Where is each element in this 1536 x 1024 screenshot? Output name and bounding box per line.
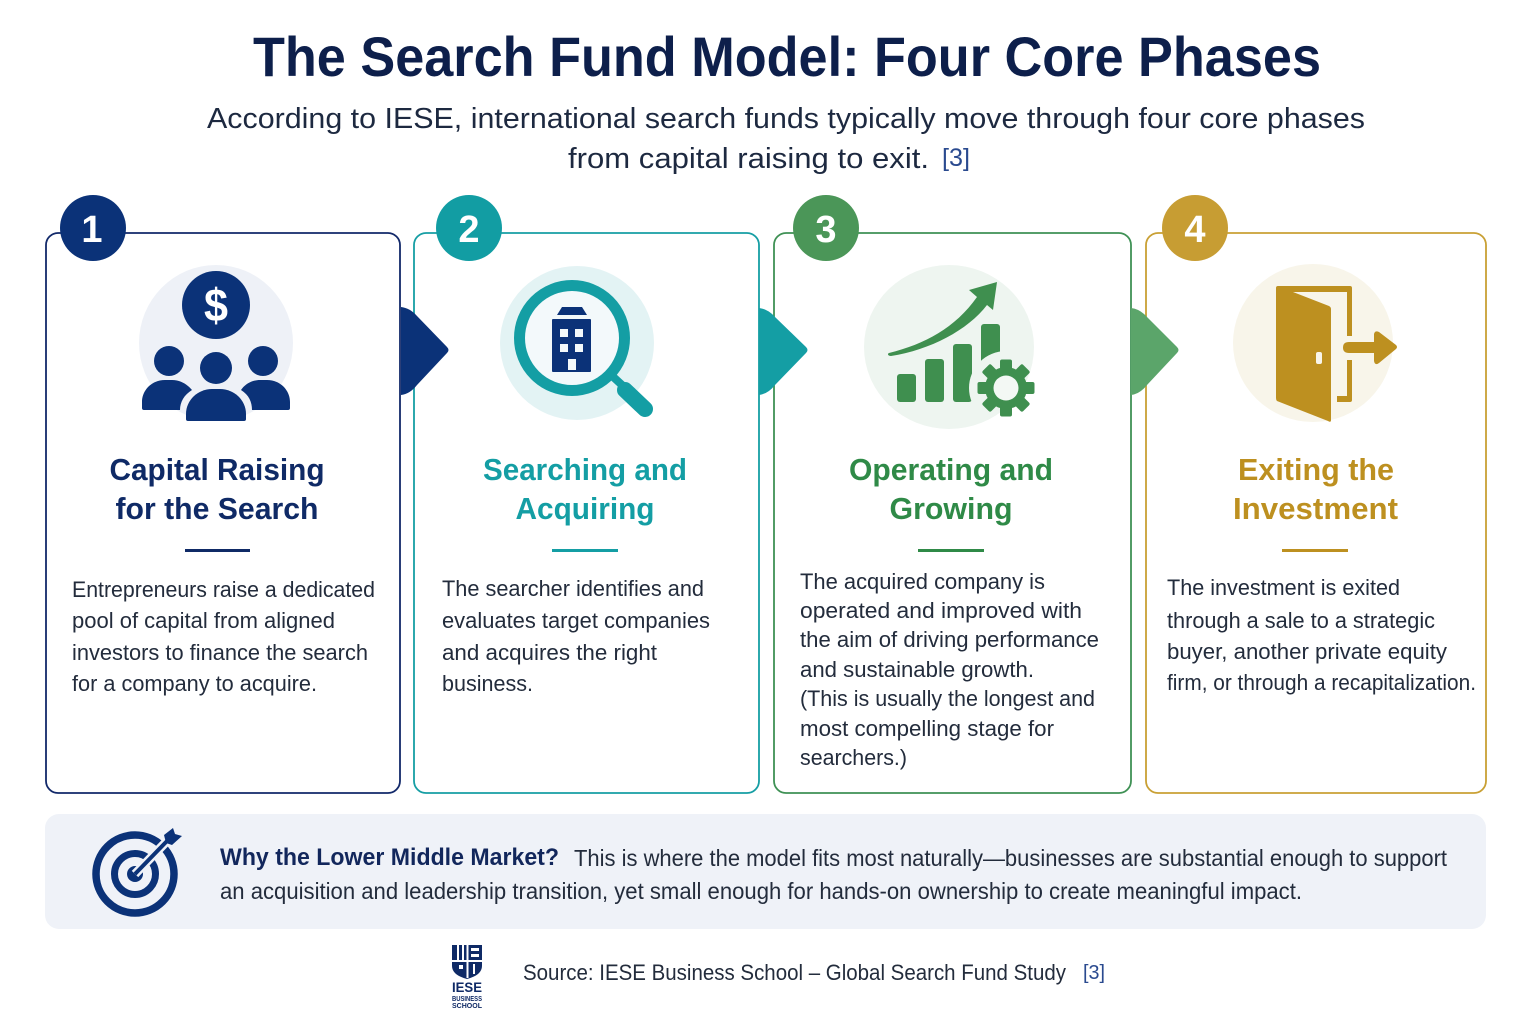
callout: why the lower middle market bbox=[45, 814, 1486, 929]
icon: target bbox=[96, 828, 182, 913]
arrow: phase 2 to 3 bbox=[759, 308, 808, 395]
source line: [3] bbox=[1083, 962, 1105, 984]
body text: business. bbox=[442, 671, 533, 696]
body text: Entrepreneurs raise a dedicated bbox=[72, 577, 375, 602]
step badge 2 bbox=[436, 195, 502, 261]
heading bbox=[483, 452, 687, 526]
heading: Investment bbox=[1233, 491, 1398, 526]
body text: most compelling stage for bbox=[800, 716, 1054, 741]
body text bbox=[442, 576, 710, 696]
heading: Growing bbox=[890, 491, 1012, 526]
icon: magnifier over building bbox=[500, 266, 654, 420]
body text bbox=[1167, 575, 1476, 695]
body text bbox=[72, 577, 375, 696]
heading: for the Search bbox=[116, 491, 318, 526]
heading bbox=[1233, 452, 1398, 526]
body text: searchers.) bbox=[800, 745, 907, 770]
callout text: an acquisition and leadership transition, yet small enough for hands-on ownership to create meaningful impact. bbox=[220, 878, 1302, 904]
body text: firm, or through a recapitalization. bbox=[1167, 670, 1476, 695]
body text: investors to finance the search bbox=[72, 640, 368, 665]
icon: exit door bbox=[1233, 264, 1397, 422]
heading bbox=[849, 452, 1053, 526]
step badge 2: 2 bbox=[458, 209, 480, 251]
step badge 4 bbox=[1162, 195, 1228, 261]
arrow: phase 3 to 4 bbox=[1131, 308, 1178, 395]
subtitle: from capital raising to exit. bbox=[568, 143, 929, 175]
logo: IESE Business School: SCHOOL bbox=[452, 1001, 482, 1010]
body text: The acquired company is bbox=[800, 569, 1045, 594]
arrow: phase 1 to 2 bbox=[401, 307, 448, 395]
heading: Searching and bbox=[483, 452, 687, 487]
source line: Source: IESE Business School – Global Search Fund Study bbox=[523, 960, 1066, 985]
heading: Operating and bbox=[849, 452, 1053, 487]
body text: The searcher identifies and bbox=[442, 576, 704, 601]
step badge 3: 3 bbox=[815, 209, 837, 251]
subtitle: According to IESE, international search funds typically move through four core phases bbox=[207, 103, 1365, 135]
body text: The investment is exited bbox=[1167, 575, 1400, 600]
step badge 1 bbox=[60, 195, 126, 261]
body text: buyer, another private equity bbox=[1167, 639, 1448, 664]
body text: operated and improved with bbox=[800, 598, 1082, 623]
heading: Exiting the bbox=[1238, 452, 1394, 487]
logo: IESE Business School: IESE bbox=[452, 979, 482, 995]
body text: evaluates target companies bbox=[442, 608, 710, 633]
body text: and acquires the right bbox=[442, 640, 658, 665]
icon: growth chart and gear bbox=[864, 265, 1043, 429]
body text: and sustainable growth. bbox=[800, 657, 1034, 682]
callout text: This is where the model fits most naturally—businesses are substantial enough to support bbox=[574, 845, 1448, 871]
subtitle: [3] bbox=[942, 144, 970, 172]
body text: pool of capital from aligned bbox=[72, 608, 335, 633]
logo: IESE Business School bbox=[452, 945, 482, 1010]
step badge 1: 1 bbox=[81, 209, 103, 251]
body text: for a company to acquire. bbox=[72, 671, 317, 696]
body text bbox=[800, 569, 1099, 770]
panel: operating and growing bbox=[774, 195, 1131, 793]
icon: investors and dollar bbox=[139, 265, 293, 421]
heading bbox=[110, 452, 324, 526]
callout text bbox=[220, 844, 1448, 904]
body text: through a sale to a strategic bbox=[1167, 608, 1435, 633]
panel: searching and acquiring bbox=[414, 195, 759, 793]
step badge 4: 4 bbox=[1184, 209, 1206, 251]
panel: capital raising bbox=[46, 195, 400, 793]
heading: Acquiring bbox=[516, 491, 654, 526]
icon: investors and dollar: $ bbox=[204, 279, 228, 331]
body text: (This is usually the longest and bbox=[800, 686, 1095, 711]
logo: IESE Business School: BUSINESS bbox=[452, 994, 482, 1003]
callout text: Why the Lower Middle Market? bbox=[220, 844, 559, 871]
step badge 3 bbox=[793, 195, 859, 261]
subtitle bbox=[207, 103, 1365, 175]
body text: the aim of driving performance bbox=[800, 627, 1099, 652]
panel: exiting the investment bbox=[1146, 195, 1486, 793]
title: The Search Fund Model: Four Core Phases bbox=[253, 25, 1321, 88]
heading: Capital Raising bbox=[110, 452, 324, 487]
